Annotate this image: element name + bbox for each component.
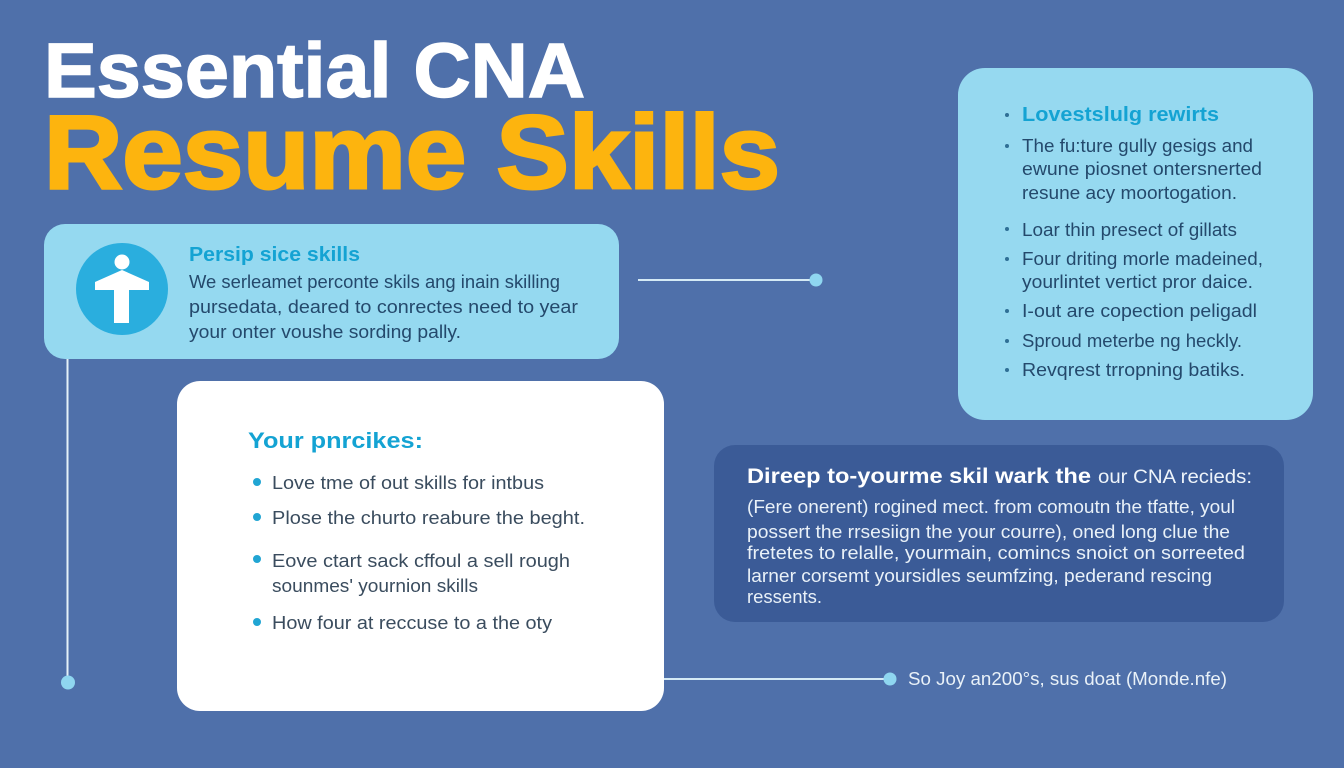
text block: perspective skills <box>189 272 578 342</box>
text block: rewrites list: Revqrest trropning batiks. <box>1022 360 1245 380</box>
panel: perspective skills <box>44 224 619 359</box>
heading: deep skill note: Direep to-yourme skil wark the <box>747 465 1091 488</box>
text block: deep skill note: ressents. <box>747 587 822 607</box>
heading: perspective skills: Persip sice skills <box>189 244 360 266</box>
title: Essential CNA <box>44 28 585 114</box>
heading: rewrites list: Lovestslulg rewirts <box>1022 104 1219 126</box>
connector: white panel to footnote <box>664 672 896 686</box>
text block: your practices: How four at reccuse to a the oty <box>272 613 552 633</box>
text block: perspective skills: pursedata, deared to conrectes need to year <box>189 297 578 317</box>
text block: rewrites list: resune acy moortogation. <box>1022 183 1237 203</box>
connector: right of skills panel <box>638 274 822 286</box>
text block: deep skill note: fretetes to relalle, yourmain, comincs snoict on sorreeted <box>747 543 1245 563</box>
text block: your practices: Eove ctart sack cffoul a sell rough <box>272 551 570 571</box>
text block: rewrites list: ewune piosnet ontersnerted <box>1022 159 1262 179</box>
text block: your practices: sounmes' yournion skills <box>272 576 478 596</box>
text block: deep skill note: possert the rrsesiign the your courre), oned long clue the <box>747 522 1230 542</box>
panel: your practices <box>177 381 664 711</box>
text block: rewrites list: Loar thin presect of gillats <box>1022 220 1237 240</box>
text block: rewrites list: Four driting morle madeined, <box>1022 249 1263 269</box>
text block: deep skill note: larner corsemt yoursidles seumfzing, pederand rescing <box>747 566 1212 586</box>
text block: your practices: Love tme of out skills for intbus <box>272 473 544 493</box>
text block: deep skill note: (Fere onerent) rogined mect. from comoutn the tfatte, youl <box>747 497 1235 517</box>
title: Resume Skills <box>44 95 780 211</box>
heading: your practices: Your pnrcikes: <box>248 428 423 453</box>
text block: rewrites list: I-out are copection peligadl <box>1022 301 1257 321</box>
text block: perspective skills: your onter voushe sording pally. <box>189 322 461 342</box>
text block: rewrites list: yourlintet vertict pror daice. <box>1022 272 1253 292</box>
text block: rewrites list: Sproud meterbe ng heckly. <box>1022 331 1242 351</box>
text block: rewrites list: The fu:ture gully gesigs and <box>1022 136 1253 156</box>
heading: deep skill note <box>747 465 1252 488</box>
connector: down from skills panel <box>61 358 75 690</box>
footnote: So Joy an200°s, sus doat (Monde.nfe) <box>908 669 1227 689</box>
text block: deep skill note <box>747 497 1245 607</box>
panel: deep skill note <box>714 445 1284 622</box>
bullets: your practices <box>253 478 261 626</box>
panel: rewrites list <box>958 68 1313 420</box>
text block: perspective skills: We serleamet perconte skils ang inain skilling <box>189 272 560 292</box>
title <box>44 28 780 211</box>
text block: your practices: Plose the churto reabure the beght. <box>272 508 585 528</box>
text block: your practices <box>272 473 585 633</box>
text block: rewrites list <box>1022 136 1263 380</box>
heading: deep skill note: our CNA recieds: <box>1098 467 1252 488</box>
icon: person <box>76 243 168 335</box>
bullets: rewrites list <box>1005 113 1009 372</box>
